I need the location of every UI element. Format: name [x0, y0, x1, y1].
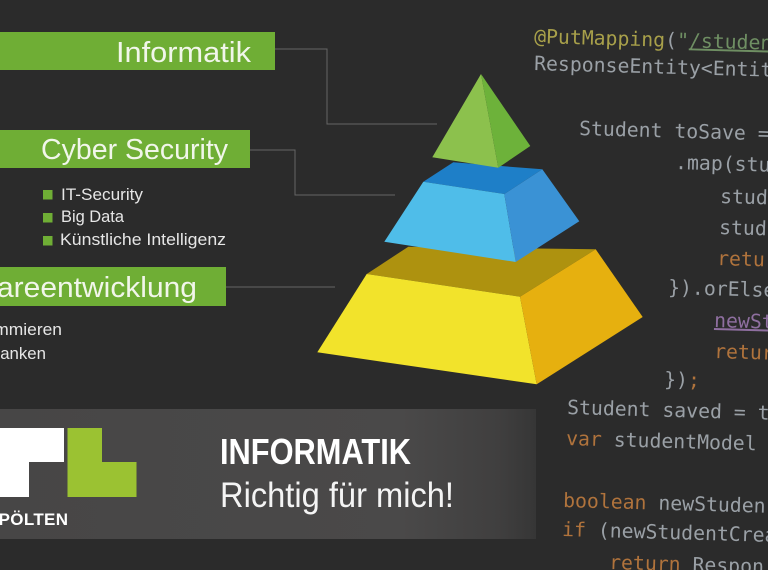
logo — [0, 428, 136, 529]
code line 4: .map(stu — [675, 151, 768, 177]
banner subtitle: Richtig für mich! — [220, 476, 454, 515]
code line 13: var studentModel — [566, 427, 757, 455]
pyramid base: yellow — [317, 247, 643, 384]
bullet: IT-Security: IT-Security — [61, 185, 143, 204]
list: Softwareentwicklung topics — [0, 320, 62, 363]
pyramid middle: blue — [384, 162, 579, 262]
panel: Informatik heading — [0, 32, 275, 70]
connector: Informatik to pyramid top — [275, 49, 437, 124]
code line 14: boolean newStuden — [563, 489, 766, 518]
list: Cyber Security topics — [43, 185, 226, 249]
code line 11: }); — [664, 368, 700, 392]
pyramid top: green — [432, 74, 530, 168]
heading text: Cyber Security: Cyber Security — [41, 134, 228, 166]
connector: Softwareentwicklung to pyramid base — [226, 286, 335, 288]
banner title: INFORMATIK — [220, 431, 411, 472]
code line 3: Student toSave = — [579, 117, 768, 145]
code listing — [534, 25, 768, 570]
panel: Cyber Security heading — [0, 130, 250, 168]
bullet: Künstliche Intelligenz: Künstliche Intelligenz — [60, 230, 226, 249]
code line 5: stud — [720, 185, 768, 209]
code line 6: stud — [719, 216, 767, 240]
connector: Cyber Security to pyramid middle — [250, 150, 395, 195]
code line 1: @PutMapping("/studen — [534, 25, 768, 55]
chart: three-tier pyramid — [317, 74, 643, 384]
logo: green mark — [68, 428, 136, 497]
heading text: Informatik: Informatik — [116, 37, 252, 69]
panel: Softwareentwicklung heading — [0, 267, 226, 306]
logo: white mark — [0, 428, 64, 497]
code line 12: Student saved = t — [567, 396, 768, 425]
bullet: Big Data: Big Data — [61, 207, 125, 226]
banner — [0, 409, 536, 539]
code line 2: ResponseEntity<Entit — [534, 52, 768, 82]
